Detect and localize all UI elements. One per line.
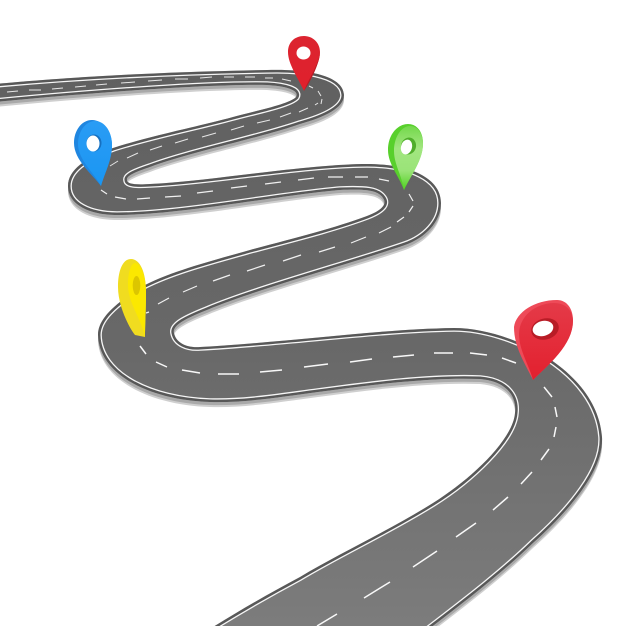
icon: yellow pin xyxy=(118,259,146,337)
icon: large red pin xyxy=(514,300,573,380)
road: far centre dashes xyxy=(7,77,322,166)
icon: red pin, far xyxy=(288,36,320,91)
icon: blue pin xyxy=(74,120,112,186)
road: near centre dashes xyxy=(140,346,557,626)
road: middle centre dashes xyxy=(101,177,413,313)
icon: green pin xyxy=(388,124,423,190)
